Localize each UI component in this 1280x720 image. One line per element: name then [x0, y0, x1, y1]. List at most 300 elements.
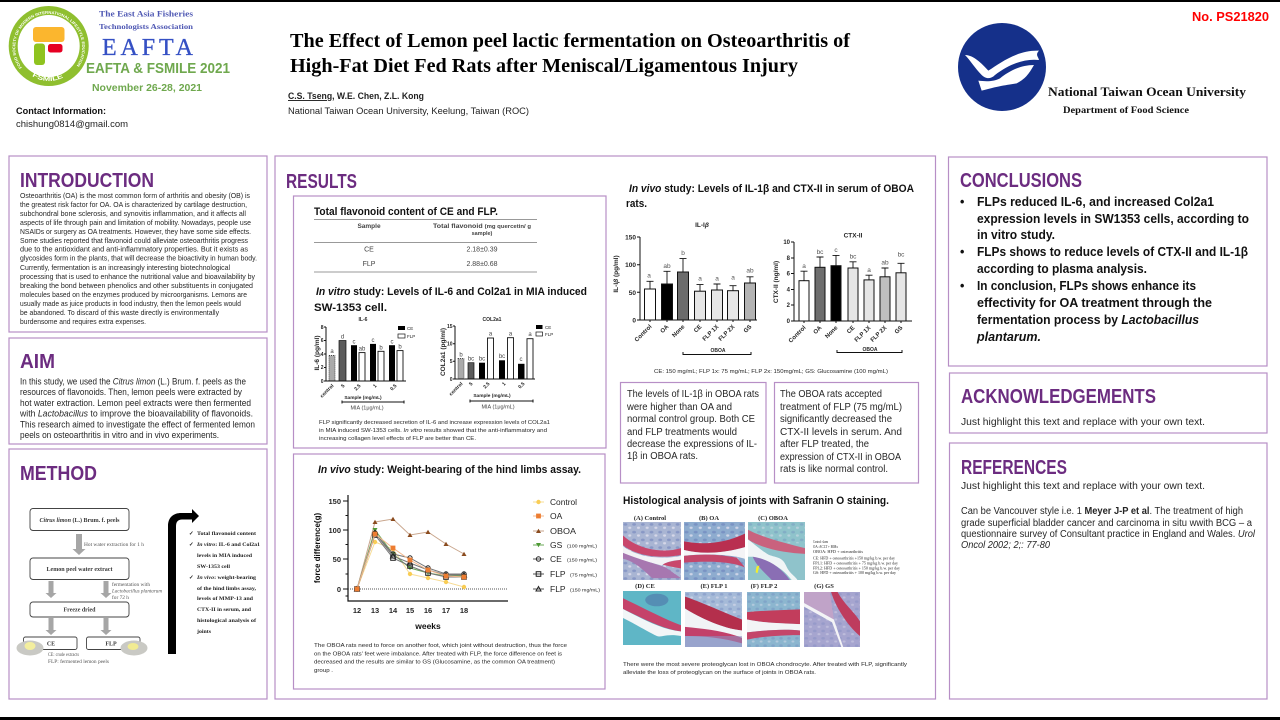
- bar chart: CTX-II: OBOA: [862, 347, 878, 353]
- label: hot water extraction: Hot water extraction for 1 h: [84, 541, 144, 548]
- bar chart: COL2a1: Sample (mg/mL): [473, 393, 511, 399]
- assay checklist: In vivo: weight-bearing: [196, 575, 256, 581]
- text box: IL-1 beta findings: The levels of IL-1β in OBOA rats: [627, 389, 759, 400]
- aim text: resources of flavonoids. Then, lemon peels were extracted by: [20, 387, 242, 397]
- reference entry: [961, 506, 1256, 551]
- weight-bearing caption: [314, 643, 567, 674]
- bar chart: IL-6: MIA (1μg/mL): [350, 406, 384, 412]
- bar chart: IL-6: c: [372, 338, 374, 344]
- bar chart: CTX-II: 2: [787, 303, 791, 309]
- aim text: with Lactobacillus to improve the bioavailability of flavonoids.: [19, 408, 253, 418]
- introduction text: the greatest risk factor for OA. OA is characterized by cartilage destruction,: [20, 200, 247, 209]
- in vitro caption: [319, 420, 550, 442]
- bar chart: COL2a1: FLP: [545, 332, 553, 337]
- bottom black edge: [0, 717, 1280, 720]
- bar chart: COL2a1: COL2a1 (pg/ml): [440, 328, 447, 376]
- aim text: hot water extraction. Lemon peel extracts were then fermented: [20, 398, 251, 408]
- bar chart: IL-1 beta: a: [647, 272, 651, 280]
- bar chart: IL-1 beta: OBOA: [710, 348, 726, 354]
- micrograph labels: (D) CE: [635, 583, 655, 590]
- bar chart: IL-1 beta: a: [698, 276, 702, 282]
- weight-bearing caption: The OBOA rats need to force on another foot, which joint without destruction, thus the force: [314, 643, 567, 649]
- bar chart: IL-6: IL-6: [359, 317, 368, 323]
- bar chart: IL-6: c: [352, 340, 356, 346]
- micrograph labels: (C) OBOA: [758, 515, 788, 522]
- conclusions list: according to plasma analysis.: [977, 262, 1147, 276]
- micrograph labels: [634, 515, 834, 590]
- panel: aim: [9, 338, 267, 444]
- line chart: force difference: 100: [328, 526, 341, 535]
- text box: CTX-II findings: after FLP treated, the: [780, 439, 869, 450]
- table rules: [314, 220, 537, 272]
- conference title and date: November 26-28, 2021: [92, 82, 202, 94]
- bar chart: IL-1 beta: IL-Iβ (pg/ml): [613, 255, 620, 293]
- micrograph legend notes: OBOA: HFD + osteoarthritis: [813, 550, 864, 554]
- table header: Sample: [357, 223, 381, 230]
- panel: introduction: [9, 156, 267, 332]
- line chart: force difference: 50: [333, 555, 341, 564]
- line chart legend: CE: [550, 554, 562, 564]
- introduction text: breaking the bond between phenolics and other substituents in conjugated: [20, 281, 253, 290]
- bar chart: CTX-II: 8: [787, 256, 791, 262]
- weight-bearing caption: on the OBOA rats' feet were imbalance. After treated with FLP, the force difference on feet is: [314, 652, 562, 658]
- image: F FLP 2: [747, 592, 800, 647]
- reference entry: Can be Vancouver style i.e. 1 Meyer J-P et al. The treatment of high: [961, 506, 1243, 517]
- histology micrographs: [623, 515, 900, 647]
- icon: FSMILE logo: FSMILE: [32, 73, 64, 82]
- bar chart: IL-1 beta: FLP 1X: [702, 324, 720, 343]
- bar chart: IL-6: 1: [372, 383, 379, 389]
- step: FLP: [86, 637, 140, 650]
- bar chart: CTX-II: ab: [881, 260, 889, 266]
- bar chart: CTX-II: 10: [783, 240, 791, 246]
- conclusions list: •: [960, 195, 964, 209]
- step: lemon peel water extract: [30, 558, 129, 580]
- micrograph labels: (B) OA: [699, 515, 719, 522]
- conclusions list: expression levels in SW1353 cells, according to: [977, 212, 1249, 226]
- bar chart: CTX-II: 0: [787, 319, 791, 325]
- text box: IL-1 beta findings: 1β in OBOA rats.: [627, 451, 698, 462]
- assay checklist: histological analysis of: [197, 618, 256, 624]
- reference entry: questionnaire survey of Consultant practice in England and Wales. Urol: [961, 529, 1256, 540]
- micrograph legend notes: [813, 540, 900, 575]
- bar chart: COL2a1: 10: [447, 342, 453, 348]
- line chart: force difference: 13: [371, 606, 379, 615]
- bar chart: COL2a1: bc: [499, 354, 505, 360]
- bar chart: COL2a1: bc: [479, 356, 485, 362]
- conclusions list: plantarum.: [976, 330, 1041, 344]
- in vitro caption: increasing collagen level effects of FLP are better than CE.: [319, 436, 476, 442]
- bar chart: CTX-II: a: [867, 267, 871, 274]
- bar chart: CTX-II: FLP 1X: [854, 325, 872, 344]
- line chart: force difference: 0: [337, 585, 341, 594]
- bar chart: CTX-II: OA: [813, 325, 824, 336]
- bar chart: IL-6: Sample (mg/mL): [344, 395, 382, 401]
- bar chart: COL2a1: c: [520, 357, 522, 363]
- heading: serum levels: rats.: [626, 198, 647, 210]
- bar chart: IL-1 beta: ab: [746, 268, 754, 274]
- bar chart: COL2a1: 5: [450, 359, 453, 365]
- introduction text: burdensome and requires extra expenses.: [20, 317, 146, 326]
- bar chart: IL-6: 6: [321, 338, 324, 344]
- heading: references: REFERENCES: [961, 457, 1067, 479]
- arrow: black bent arrow: [168, 509, 199, 654]
- bar chart: CTX-II: None: [825, 325, 840, 340]
- panel: conclusions: [948, 157, 1267, 366]
- bar chart: COL2a1: a: [489, 332, 493, 338]
- introduction text: usually made as juice products in food industry, then the lemon peels would: [20, 299, 241, 308]
- line chart legend: [533, 497, 601, 594]
- line chart: force difference: 16: [424, 606, 432, 615]
- bar chart: IL-1 beta: 50: [629, 290, 636, 297]
- bar chart: IL-6: b: [379, 346, 383, 352]
- references placeholder: Just highlight this text and replace with your own text.: [961, 480, 1205, 492]
- table header: sample): [472, 231, 493, 237]
- icon: NTOU logo: [958, 23, 1046, 111]
- assay checklist: CTX-II in serum, and: [197, 607, 251, 613]
- heading: acknowledgements: ACKNOWLEDGEMENTS: [961, 386, 1156, 408]
- bar chart: CTX-II: FLP 2X: [870, 325, 888, 344]
- bar chart: CTX-II: CTX-II (ng/ml): [773, 261, 780, 303]
- bar chart: IL-1 beta: a: [731, 274, 735, 282]
- reference entry: Oncol 2002; 2;: 77-80: [961, 540, 1051, 551]
- image: A control: [623, 522, 681, 580]
- arrow: to freeze dried right: [100, 581, 112, 598]
- bar chart: COL2a1: a: [509, 332, 513, 338]
- heading: aim: AIM: [20, 351, 55, 373]
- bar chart: COL2a1: 0.5: [517, 381, 527, 390]
- assay checklist: levels in MIA induced: [197, 553, 252, 559]
- line chart legend: FLP: [550, 569, 566, 579]
- step: freeze dried: Freeze dried: [64, 608, 96, 614]
- text box: CTX-II findings: treatment of FLP (75 mg/mL): [780, 402, 902, 413]
- micrograph labels: (F) FLP 2: [751, 583, 777, 590]
- bar chart: IL-1 beta: 0: [632, 318, 636, 324]
- table header: [357, 223, 531, 237]
- arrow: hot water extraction: [72, 534, 86, 555]
- bar chart: IL-6: IL-6 (pg/ml): [314, 335, 321, 371]
- EAFTA association name: [99, 10, 194, 61]
- conclusions list: •: [960, 245, 964, 259]
- table row: CE: [364, 246, 498, 254]
- EAFTA association name: The East Asia Fisheries: [99, 10, 193, 18]
- bar chart: COL2a1: 5: [468, 381, 475, 387]
- bar chart: IL-6: 4: [321, 352, 324, 358]
- heading: serum levels: [626, 183, 914, 210]
- micrograph labels: (A) Control: [634, 515, 666, 522]
- dose footnote: CE: 150 mg/mL; FLP 1x: 75 mg/mL; FLP 2x: 150mg/mL; GS: Glucosamine (100 mg/mL): [654, 369, 888, 375]
- introduction text: Osteoarthritis (OA) is the most common form of arthritis and obesity (OB) is: [20, 191, 250, 200]
- bar chart: COL2a1: 2.5: [482, 381, 492, 390]
- line chart legend: (100 mg/mL): [567, 544, 598, 548]
- reference entry: grade superficial bladder cancer and carcinoma in situ wwith BCG – a: [961, 518, 1253, 529]
- bar chart: IL-1 beta: IL-Iβ: [695, 222, 709, 229]
- line chart: force difference: 150: [328, 497, 341, 506]
- line chart: force difference: [313, 495, 508, 631]
- image: B OA: [684, 522, 745, 580]
- bar chart: IL-1 beta: None: [672, 324, 687, 339]
- bar chart: COL2a1: COL2a1: [483, 317, 502, 323]
- line chart: force difference: 14: [389, 606, 398, 615]
- introduction text: glycosides form in the plants, that will decrease the bioactivity in human body.: [20, 254, 257, 262]
- image: E FLP 1: [685, 592, 742, 647]
- micrograph legend notes: Control: sham: [813, 540, 828, 544]
- text box: CTX-II findings: rats is like normal control.: [780, 464, 888, 475]
- step: FLP: FLP: [105, 642, 117, 648]
- label: fermentation: Lactobacillus plantarum: [111, 590, 162, 594]
- conference title and date: [86, 61, 230, 94]
- label: fermentation: [111, 583, 162, 601]
- bar chart: COL2a1: MIA (1μg/mL): [481, 404, 515, 410]
- text box: CTX-II findings: CTX-II levels in serum. And: [780, 427, 902, 438]
- introduction text: Currently, fermentation is an increasingly interesting biotechnological: [20, 263, 230, 272]
- conclusions list: FLPs shows to reduce levels of CTX-II and IL-1β: [977, 245, 1248, 259]
- EAFTA association name: Technologists Association: [99, 22, 194, 31]
- introduction text: processing that is used to enhance the nutritional value and bioavailability by: [20, 272, 255, 281]
- authors: C.S. Tseng, W.E. Chen, Z.L. Kong: [288, 91, 424, 102]
- line chart: force difference: 17: [442, 606, 450, 615]
- aim text: [19, 376, 255, 440]
- text box: IL-1 beta findings: and FLP treatments would: [627, 427, 737, 438]
- bar chart: COL2a1: bc: [468, 356, 474, 362]
- contact information: [16, 106, 128, 130]
- assay checklist: [189, 531, 260, 635]
- in vitro caption: FLP significantly decreased secretion of IL-6 and increase expression levels of COL2a1: [319, 420, 550, 426]
- panel: method: [9, 449, 267, 699]
- university and department names: [1048, 84, 1247, 116]
- panel: acknowledgements: [950, 373, 1267, 433]
- heading: histology: Histological analysis of joints with Safranin O staining.: [623, 495, 889, 507]
- assay checklist: In vitro: IL-6 and Col2a1: [196, 542, 260, 548]
- bar chart: COL2a1: a: [528, 332, 532, 338]
- heading: method: METHOD: [20, 463, 97, 485]
- line chart legend: OBOA: [550, 526, 576, 536]
- bar chart: IL-6: [314, 317, 415, 412]
- panel: weight-bearing assay: [294, 454, 605, 689]
- text box: IL-1 beta findings: [620, 382, 766, 483]
- bar chart: IL-1 beta: a: [715, 276, 719, 282]
- text box: IL-1 beta findings: were higher than OA and: [626, 402, 732, 413]
- bar chart: IL-6: control: [319, 383, 336, 399]
- icon: CE powder: [16, 640, 44, 656]
- micrograph legend notes: FPL2: HFD + osteoarthritis + 150 mg/kg b.w. per day: [813, 566, 900, 570]
- micrograph labels: (E) FLP 1: [700, 583, 728, 590]
- bar chart: IL-6: a: [330, 349, 334, 355]
- weight-bearing caption: group .: [314, 668, 333, 674]
- bar chart: COL2a1: control: [448, 381, 465, 397]
- step: CE: [24, 637, 77, 650]
- assay checklist: ✓: [189, 575, 194, 581]
- line chart: force difference: force difference(g): [313, 513, 322, 583]
- title: High-Fat Diet Fed Rats after Meniscal/Ligamentous Injury: [290, 56, 798, 77]
- histology caption: alleviate the loss of proteoglycan on the surface of joints in OBOA rats.: [623, 670, 816, 676]
- text box: CTX-II findings: The OBOA rats accepted: [780, 389, 882, 400]
- micrograph legend notes: GS: HFD + osteoarthritis + 100 mg/kg b.w. per day: [813, 571, 896, 575]
- bar chart: COL2a1: [440, 317, 553, 410]
- bar chart: IL-6: 2.5: [353, 383, 363, 392]
- introduction text: Some studies reported that flavonoid could alleviate osteoarthritis progress: [20, 236, 248, 245]
- abbreviations note: [48, 653, 109, 665]
- contact information: Contact Information:: [16, 106, 106, 116]
- bar chart: IL-1 beta: 150: [625, 234, 636, 242]
- table title: Total flavonoid content of CE and FLP.: [314, 206, 498, 218]
- aim text: This research aimed to investigate the effect of fermented lemon: [20, 420, 255, 430]
- assay checklist: levels of MMP-13 and: [197, 596, 253, 602]
- abbreviations note: FLP: fermented lemon peels: [48, 660, 109, 665]
- flowchart: [16, 508, 162, 665]
- line chart legend: (150 mg/mL): [570, 588, 601, 592]
- conclusions list: In conclusion, FLPs shows enhance its: [977, 279, 1196, 293]
- micrograph labels: (G) GS: [814, 583, 834, 590]
- heading: serum levels: In vivo study: Levels of IL-1β and CTX-II in serum of OBOA: [629, 183, 914, 195]
- poster number: No. PS21820: [1192, 9, 1269, 24]
- affiliation: National Taiwan Ocean University, Keelung, Taiwan (ROC): [288, 106, 529, 117]
- bar chart: IL-6: 0.5: [389, 383, 399, 392]
- line chart legend: OA: [550, 511, 563, 521]
- bar chart: CTX-II: CTX-II: [844, 232, 863, 240]
- heading: in vitro study: SW-1353 cell.: [314, 302, 387, 314]
- line chart legend: (75 mg/mL): [570, 572, 598, 578]
- abbreviations note: CE: crude extracts: [48, 653, 79, 658]
- image: G GS: [804, 592, 860, 647]
- bar chart: COL2a1: 15: [447, 324, 453, 330]
- bar chart: IL-1 beta: ab: [663, 263, 671, 270]
- heading: conclusions: CONCLUSIONS: [960, 170, 1082, 192]
- image: D CE: [623, 591, 681, 645]
- table row: CE: 2.18±0.39: [466, 246, 498, 254]
- assay checklist: ✓: [189, 542, 194, 548]
- EAFTA association name: EAFTA: [102, 35, 194, 61]
- bar chart: CTX-II: bc: [898, 252, 905, 258]
- introduction text: subchondral bone sclerosis, and synovitis inflammation, and it affects all: [20, 209, 246, 218]
- heading: introduction: INTRODUCTION: [20, 170, 154, 192]
- line chart legend: GS: [550, 540, 563, 550]
- introduction text: molecules based on the enzymes produced by microorganisms. Lemons are: [20, 290, 247, 299]
- heading: weight-bearing: In vivo study: Weight-bearing of the hind limbs assay.: [318, 464, 581, 476]
- bar chart: IL-6: 5: [340, 383, 347, 389]
- assay checklist: Total flavonoid content: [197, 531, 256, 537]
- bar chart: IL-1 beta: OA: [660, 324, 671, 335]
- bar chart: COL2a1: b: [459, 352, 463, 358]
- conclusions list: [960, 195, 1249, 344]
- line chart: force difference: weeks: [414, 621, 441, 631]
- step: freeze dried: [30, 602, 129, 617]
- text box: CTX-II findings: [774, 382, 918, 483]
- micrograph legend notes: CE: HFD + osteoarthritis +150 mg/kg b.w. per day: [813, 556, 895, 560]
- bar chart: CTX-II: a: [802, 263, 806, 270]
- aim text: peels on osteoarthritis in vitro and in vivo experiments.: [20, 430, 219, 440]
- line chart: force difference: 12: [353, 606, 361, 615]
- bar chart: CTX-II: bc: [850, 254, 857, 260]
- step: citrus peels: [30, 508, 129, 530]
- histology caption: There were the most severe proteoglycan lost in OBOA chondrocyte. After treated with FLP, significantly: [623, 662, 907, 668]
- table row: FLP: [363, 261, 498, 268]
- bar chart: IL-6: FLP: [407, 334, 415, 339]
- bar chart: IL-1 beta: [613, 222, 757, 354]
- bar chart: IL-6: ab: [359, 346, 366, 352]
- icon: FLP powder: [120, 640, 148, 656]
- bar chart: CTX-II: 6: [787, 272, 791, 278]
- top black edge: [0, 0, 1280, 2]
- step: citrus peels: Citrus limon (L.) Brum. f. peels: [40, 517, 120, 524]
- bar chart: CTX-II: Control: [788, 325, 808, 344]
- text box: IL-1 beta findings: decrease the expressions of IL-: [627, 439, 757, 450]
- panel: results: [275, 156, 936, 699]
- heading: in vitro study: [314, 286, 587, 314]
- panel: flavonoid and in vitro: [294, 196, 606, 448]
- label: fermentation: for 72 h: [112, 596, 130, 601]
- bar chart: IL-6: 2: [321, 365, 324, 371]
- table header: Total flavonoid (mg quercetin/ g: [433, 223, 531, 230]
- line chart legend: (150 mg/mL): [567, 558, 598, 562]
- bar chart: CTX-II: 4: [787, 288, 791, 294]
- title: The Effect of Lemon peel lactic fermentation on Osteoarthritis of: [290, 31, 851, 52]
- conclusions list: •: [960, 279, 964, 293]
- step: CE: CE: [47, 642, 55, 648]
- bar chart: CTX-II: GS: [894, 325, 904, 336]
- line chart legend: Control: [550, 497, 577, 507]
- panel: references: [950, 443, 1267, 699]
- text box: IL-1 beta findings: normal control group. Both CE: [627, 414, 755, 425]
- heading: results: RESULTS: [286, 171, 357, 193]
- bar chart: IL-6: 0: [321, 379, 324, 385]
- bar chart: IL-1 beta: 100: [625, 262, 636, 269]
- bar chart: IL-1 beta: b: [681, 250, 685, 257]
- conclusions list: in vitro study.: [977, 228, 1055, 242]
- in vitro caption: in MIA induced SW-1353 cells. In vitro results showed that the anti-inflammatory and: [319, 428, 547, 434]
- bar chart: COL2a1: 1: [501, 381, 508, 387]
- university and department names: National Taiwan Ocean University: [1048, 84, 1247, 99]
- image: C OBOA: [748, 522, 805, 580]
- micrograph legend notes: OA: ACLT + MMx: [813, 545, 838, 549]
- bar chart: COL2a1: 0: [450, 377, 453, 383]
- introduction text: NSAIDs or surgery as OA treatments. However, they have some side effects.: [20, 227, 251, 236]
- assay checklist: SW-1353 cell: [197, 564, 231, 570]
- icon: FSMILE logo: FOOD SOCIETY OF MODERN INTERNATIONAL LIFESTYLE EDUCATION: [12, 11, 85, 69]
- assay checklist: ✓: [189, 531, 194, 537]
- arrow: to CE: [46, 618, 56, 635]
- arrow: to freeze dried left: [46, 581, 56, 598]
- arrow: to FLP: [100, 618, 112, 635]
- step: lemon peel water extract: Lemon peel water extract: [46, 567, 112, 573]
- bar chart: IL-1 beta: FLP 2X: [718, 324, 736, 343]
- line chart: force difference: 15: [406, 606, 414, 615]
- bar chart: CTX-II: c: [834, 247, 838, 254]
- bar chart: IL-6: CE: [407, 326, 413, 331]
- text box: CTX-II findings: expression of CTX-II in OBOA: [780, 452, 901, 463]
- conclusions list: FLPs reduced IL-6, and increased Col2a1: [977, 195, 1214, 209]
- bar chart: IL-6: 8: [321, 325, 324, 331]
- micrograph legend notes: FPL1: HFD + osteoarthritis + 75 mg/kg b.w. per day: [813, 562, 898, 566]
- table row: FLP: 2.88±0.68: [466, 261, 498, 268]
- conference title and date: EAFTA & FSMILE 2021: [86, 61, 230, 77]
- introduction text: due to the antioxidant and anti-inflammatory properties. But it exists as: [20, 244, 248, 254]
- line chart: force difference: 18: [460, 606, 468, 615]
- heading: in vitro study: In vitro study: Levels of IL-6 and Col2a1 in MIA induced: [316, 286, 587, 298]
- histology caption: [623, 662, 907, 676]
- contact information: chishung0814@gmail.com: [16, 119, 128, 130]
- bar chart: IL-6: c: [390, 340, 394, 346]
- conclusions list: effectivity for OA treatment through the: [977, 296, 1212, 310]
- assay checklist: joints: [196, 629, 211, 635]
- bar chart: IL-6: b: [398, 344, 402, 350]
- aim text: In this study, we used the Citrus limon (L.) Brum. f. peels as the: [20, 376, 246, 386]
- weight-bearing caption: decreased and the results are similar to GS (Glucosamine, as the common OA treatment): [314, 660, 555, 666]
- bar chart: IL-1 beta: Control: [634, 324, 654, 343]
- acknowledgements text: Just highlight this text and replace with your own text.: [961, 416, 1205, 428]
- university and department names: Department of Food Science: [1063, 106, 1189, 116]
- bar chart: IL-1 beta: CE: [693, 324, 703, 334]
